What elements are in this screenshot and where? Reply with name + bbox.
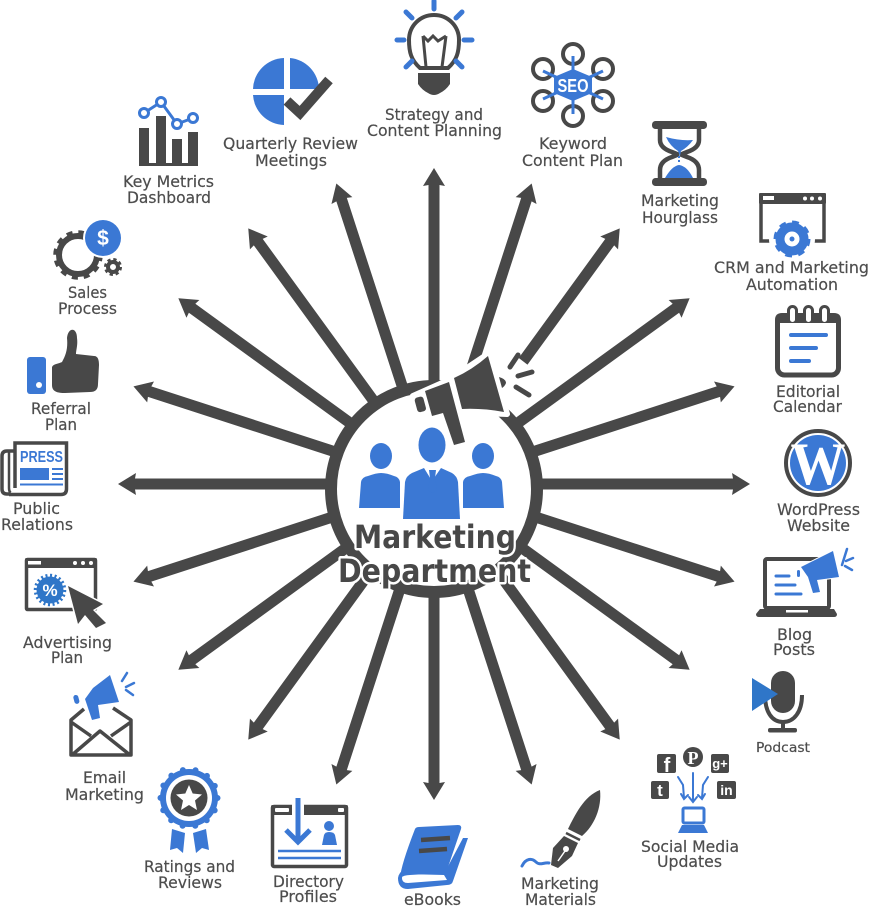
label: Reviews: [158, 873, 222, 892]
label: [123, 172, 214, 207]
label: Sales: [68, 283, 107, 302]
label: Plan: [45, 415, 77, 434]
item: referral plan: [27, 330, 99, 434]
radial arrows: [118, 168, 750, 800]
icon: wordpress logo: W: [790, 431, 846, 497]
label: Plan: [51, 648, 83, 667]
label: Directory: [273, 872, 344, 891]
label: Keyword: [539, 134, 607, 153]
icon: window with gear: [759, 193, 826, 262]
icon: social network squares: t: [657, 781, 663, 800]
icon: bar chart with line: [139, 98, 198, 166]
label: Podcast: [756, 740, 810, 756]
item: quarterly review meetings: [223, 58, 358, 170]
label: Email: [83, 768, 126, 787]
label: Strategy and: [385, 105, 483, 124]
item: social media updates: [641, 747, 739, 871]
label: Quarterly Review: [223, 134, 358, 153]
icon: three people: [359, 428, 504, 519]
label: Posts: [773, 640, 815, 659]
label: Automation: [746, 275, 838, 294]
item: wordpress website: [777, 431, 860, 535]
label: Relations: [1, 515, 73, 534]
label: [65, 768, 144, 804]
label: Website: [787, 516, 850, 535]
label: [58, 283, 117, 318]
label: [223, 134, 358, 170]
label: Hourglass: [642, 208, 718, 227]
label: Calendar: [773, 397, 842, 416]
label: eBooks: [404, 890, 461, 909]
icon: blue book: [398, 825, 468, 889]
arrow: referral: [130, 376, 437, 494]
item: directory profiles: [271, 798, 348, 906]
arrow: hourglass: [425, 222, 629, 490]
arrow: blog: [431, 474, 738, 592]
label: Key Metrics: [123, 172, 214, 191]
icon: rosette badge: [160, 769, 218, 853]
icon: pie and check: [253, 58, 329, 125]
hub title: Department: [338, 552, 531, 590]
item: marketing materials: [521, 790, 600, 909]
item: strategy and content planning: [367, 1, 502, 140]
label: [773, 382, 842, 416]
label: Referral: [31, 399, 91, 418]
arrow: materials: [424, 481, 542, 788]
label: Ratings and: [144, 857, 235, 876]
label: Process: [58, 299, 117, 318]
arrow: public relations: [118, 473, 434, 495]
label: Content Planning: [367, 121, 502, 140]
arrow: quarterly: [326, 180, 444, 487]
icon: window with down arrow and person: [271, 798, 348, 866]
label: Public: [13, 499, 60, 518]
label: Social Media: [641, 837, 739, 856]
arrow: podcast: [428, 475, 696, 679]
label: Editorial: [776, 382, 840, 401]
icon: social network squares: f: [664, 755, 671, 777]
icon: window, discount badge, cursor: %: [42, 581, 58, 600]
icon: lightbulb: [397, 1, 472, 95]
hub title: Marketing: [354, 518, 516, 556]
item: marketing hourglass: [641, 121, 719, 227]
arrow: wordpress: [434, 473, 750, 495]
icon: microphone and play: [752, 671, 802, 732]
hub ring: [331, 386, 537, 592]
label: [522, 134, 623, 170]
label: [641, 191, 719, 227]
hub title: [338, 518, 531, 590]
icon: megaphone: [413, 354, 532, 447]
item: editorial calendar: [773, 305, 842, 416]
item: ratings and reviews: [144, 769, 235, 892]
label: [641, 837, 739, 871]
arrow: email: [172, 475, 440, 679]
label: [273, 872, 344, 906]
label: Content Plan: [522, 151, 623, 170]
label: [714, 258, 869, 294]
item: podcast: [752, 671, 810, 756]
label: Materials: [525, 890, 596, 909]
item: sales process: [56, 218, 124, 318]
arrow: key metrics: [239, 222, 443, 490]
icon: social network squares: [651, 747, 736, 833]
item: advertising plan: [23, 558, 112, 667]
arrow: advertising: [130, 474, 437, 592]
item: public relations: [1, 443, 73, 534]
label: Updates: [657, 852, 722, 871]
label: [144, 857, 235, 892]
label: [23, 633, 112, 667]
item: keyword content plan: [522, 44, 623, 170]
label: CRM and Marketing: [714, 258, 869, 277]
icon: press newspaper: PRESS: [20, 449, 63, 466]
icon: gears and dollar: $: [97, 227, 109, 250]
label: [31, 399, 91, 434]
label: Blog: [777, 625, 812, 644]
item: ebooks: [398, 825, 468, 909]
arrow: editorial: [431, 376, 738, 494]
label: Marketing: [65, 785, 144, 804]
label: Dashboard: [127, 188, 211, 207]
icon: notepad calendar: [775, 305, 841, 375]
arrow: strategy: [423, 168, 445, 484]
label: Profiles: [279, 887, 337, 906]
icon: SEO hexagon: SEO: [558, 76, 588, 96]
icon: envelope with megaphone: [71, 673, 134, 755]
label: Marketing: [641, 191, 719, 210]
label: Advertising: [23, 633, 112, 652]
icon: laptop with megaphone: [756, 549, 853, 617]
label: Marketing: [521, 874, 599, 893]
icon: social network squares: in: [720, 782, 733, 798]
central hub: [331, 354, 537, 592]
label: [367, 105, 502, 140]
label: WordPress: [777, 500, 860, 519]
arrow: directory: [326, 481, 444, 788]
item: email marketing: [65, 673, 144, 804]
label: [777, 500, 860, 535]
arrow: social: [425, 478, 629, 746]
icon: hourglass: [652, 121, 707, 186]
item: key metrics dashboard: [123, 98, 214, 207]
arrow: sales: [172, 289, 440, 493]
arrow: crm: [428, 289, 696, 493]
icon: social network squares: P: [688, 748, 698, 768]
item: blog posts: [756, 549, 853, 659]
icon: social network squares: g+: [712, 756, 728, 771]
label: [1, 499, 73, 534]
item: crm and marketing automation: [714, 193, 869, 294]
arrow: ratings: [239, 478, 443, 746]
arrow: ebooks: [423, 484, 445, 800]
label: [773, 625, 815, 659]
arrow: keyword: [424, 180, 542, 487]
label: [521, 874, 599, 909]
icon: thumbs up: [27, 330, 99, 394]
icon: fountain pen: [522, 790, 600, 868]
label: Meetings: [255, 151, 327, 170]
